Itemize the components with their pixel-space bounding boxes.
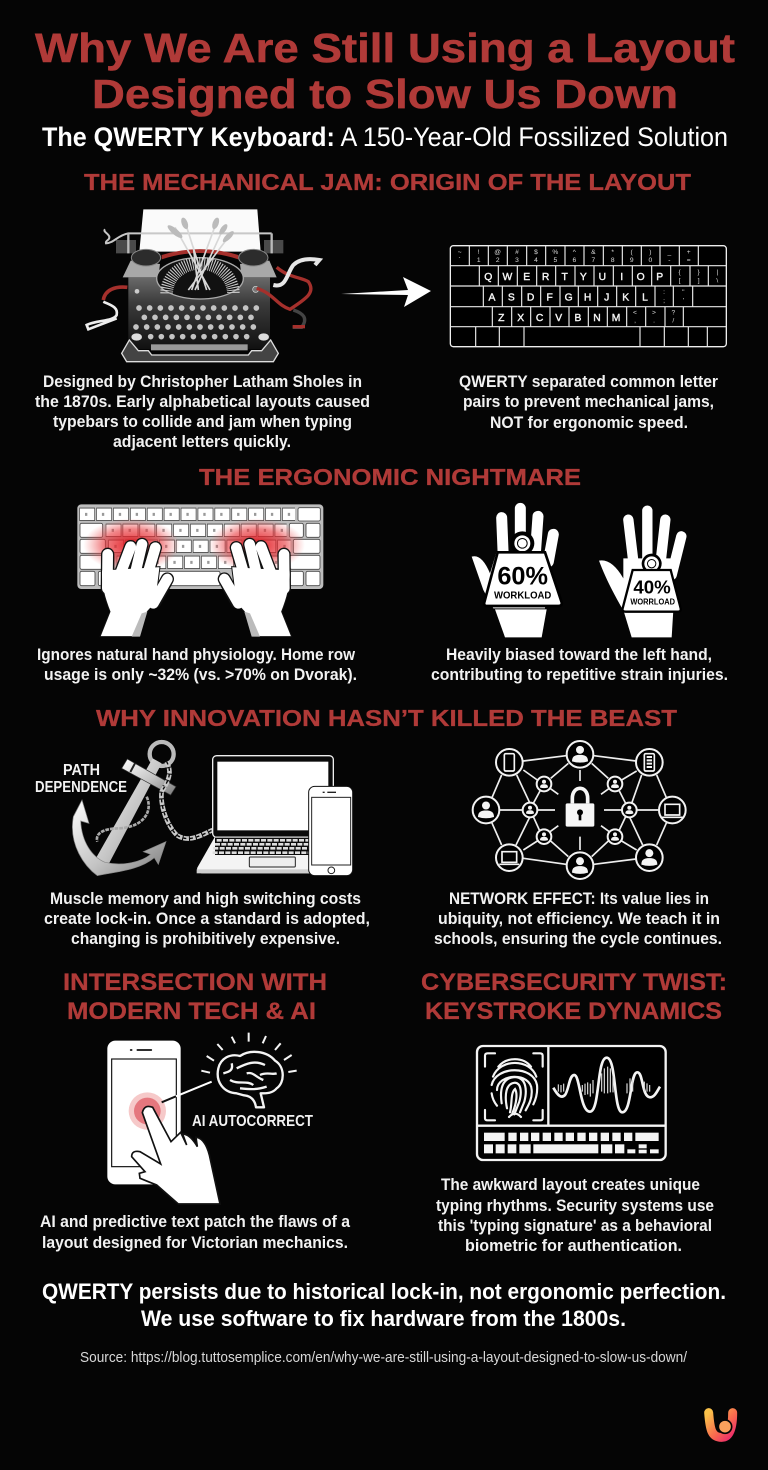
left hand — [100, 544, 167, 637]
icon: QWERTY keyboard outline: 1 — [477, 257, 481, 264]
icon: hand with 40% workload weight: 40% — [633, 577, 671, 598]
icon: QWERTY keyboard outline: Y — [580, 272, 587, 283]
label: path dependence: PATH — [63, 762, 100, 779]
icon: QWERTY keyboard outline: ( — [631, 249, 634, 256]
heading: ergonomic nightmare: THE ERGONOMIC NIGHTMARE — [199, 464, 581, 490]
icon: QWERTY keyboard outline — [450, 246, 726, 347]
text: home row usage — [37, 645, 357, 684]
icon: QWERTY keyboard outline: R — [542, 272, 549, 283]
icon: QWERTY keyboard outline: ^ — [573, 249, 577, 256]
icon: QWERTY keyboard outline: 0 — [648, 257, 652, 264]
heading: modern tech and AI: INTERSECTION WITH — [63, 969, 327, 996]
text: typing signature: this 'typing signature' as a behavioral — [438, 1216, 712, 1235]
icon: QWERTY keyboard outline: A — [489, 293, 496, 304]
text: QWERTY purpose: QWERTY separated common letter — [459, 372, 718, 391]
icon: QWERTY keyboard outline: 5 — [553, 257, 557, 264]
icon: QWERTY keyboard outline: % — [552, 249, 558, 256]
subtitle: The QWERTY Keyboard: A 150-Year-Old Fossilized Solution — [42, 122, 728, 152]
icon: QWERTY keyboard outline: N — [593, 313, 601, 324]
icon: phone with AI brain — [107, 1033, 297, 1204]
text: typing signature: biometric for authentication. — [465, 1236, 682, 1255]
conclusion — [42, 1279, 726, 1331]
heading: cybersecurity twist: CYBERSECURITY TWIST: — [421, 969, 727, 996]
heading: modern tech and AI — [63, 969, 327, 1025]
icon: hand with 60% workload weight: 60% — [497, 562, 548, 590]
source: Source: https://blog.tuttosemplice.com/en/why-we-are-still-using-a-layout-designed-to-slow-us-down/ — [80, 1349, 688, 1366]
icon: hand with 60% workload weight: WORKLOAD — [494, 591, 552, 602]
text: muscle memory: Muscle memory and high switching costs — [50, 889, 361, 908]
heading: the mechanical jam: THE MECHANICAL JAM: ORIGIN OF THE LAYOUT — [84, 169, 691, 195]
icon: QWERTY keyboard outline: D — [527, 293, 534, 304]
icon: QWERTY keyboard outline: 3 — [515, 257, 519, 264]
icon: QWERTY keyboard outline: ) — [649, 249, 651, 256]
icon: QWERTY keyboard outline: & — [591, 249, 596, 256]
icon: QWERTY keyboard outline: = — [687, 257, 691, 264]
fingerprint — [485, 1053, 543, 1120]
icon: QWERTY keyboard outline: 4 — [534, 257, 538, 264]
icon: QWERTY keyboard outline: ? — [671, 309, 675, 316]
text: left hand bias: Heavily biased toward the left hand, — [446, 645, 712, 664]
icon: QWERTY keyboard outline: $ — [534, 249, 538, 256]
icon: QWERTY keyboard outline: C — [536, 313, 544, 324]
text: muscle memory: create lock-in. Once a standard is adopted, — [44, 909, 370, 928]
logo — [709, 1413, 733, 1437]
icon: QWERTY keyboard outline: I — [620, 272, 623, 283]
icon: hands on keyboard heat map — [77, 504, 323, 637]
icon: QWERTY keyboard outline: V — [555, 313, 562, 324]
text: QWERTY purpose: pairs to prevent mechanical jams, — [463, 392, 714, 411]
icon: QWERTY keyboard outline: : — [663, 289, 665, 296]
icon: QWERTY keyboard outline: S — [508, 293, 515, 304]
text: Sholes origin: typebars to collide and jam when typing — [53, 412, 352, 431]
icon: QWERTY keyboard outline: G — [565, 293, 573, 304]
icon: QWERTY keyboard outline: B — [575, 313, 582, 324]
text: typing signature: The awkward layout creates unique — [441, 1175, 700, 1194]
text: AI patch: AI and predictive text patch the flaws of a — [40, 1212, 351, 1231]
text: muscle memory — [44, 889, 370, 948]
icon: QWERTY keyboard outline: < — [633, 309, 637, 316]
icon: QWERTY keyboard outline: > — [652, 309, 656, 316]
icon: QWERTY keyboard outline: * — [611, 249, 614, 256]
icon: QWERTY keyboard outline: ' — [683, 297, 684, 304]
icon: QWERTY keyboard outline: 7 — [591, 257, 595, 264]
icon: QWERTY keyboard outline: } — [698, 269, 701, 276]
icon: QWERTY keyboard outline: Q — [484, 272, 492, 283]
heading: why innovation: WHY INNOVATION HASN’T KILLED THE BEAST — [96, 705, 677, 731]
icon: QWERTY keyboard outline: H — [584, 293, 591, 304]
icon: QWERTY keyboard outline: @ — [494, 249, 501, 256]
title — [35, 25, 735, 117]
icon: QWERTY keyboard outline: E — [523, 272, 530, 283]
icon: QWERTY keyboard outline: 6 — [572, 257, 576, 264]
icon: QWERTY keyboard outline: ` — [459, 257, 461, 264]
text: Sholes origin: Designed by Christopher Latham Sholes in — [43, 372, 362, 391]
text: typing signature: typing rhythms. Security systems use — [436, 1196, 714, 1215]
icon: QWERTY keyboard outline: X — [517, 313, 524, 324]
icon: QWERTY keyboard outline: , — [634, 318, 636, 325]
text: Sholes origin: adjacent letters quickly. — [113, 432, 291, 451]
text: network effect — [434, 889, 722, 948]
label: path dependence: DEPENDENCE — [35, 779, 127, 796]
icon: QWERTY keyboard outline: # — [515, 249, 519, 256]
icon: QWERTY keyboard outline: 9 — [630, 257, 634, 264]
text: left hand bias: contributing to repetitive strain injuries. — [431, 665, 728, 684]
icon: QWERTY keyboard outline: L — [642, 293, 648, 304]
heading: cybersecurity twist: KEYSTROKE DYNAMICS — [425, 998, 722, 1025]
text: AI patch: layout designed for Victorian mechanics. — [42, 1233, 348, 1252]
icon: QWERTY keyboard outline: T — [562, 272, 569, 283]
icon: QWERTY keyboard outline: J — [604, 293, 609, 304]
icon: anchor chained to laptop and phone — [72, 742, 353, 876]
text: Sholes origin: the 1870s. Early alphabetical layouts caused — [35, 392, 370, 411]
text: home row usage: usage is only ~32% (vs. >70% on Dvorak). — [44, 665, 357, 684]
heading: cybersecurity twist — [421, 969, 727, 1025]
icon: QWERTY keyboard outline: " — [682, 289, 685, 296]
icon: QWERTY keyboard outline: + — [687, 249, 691, 256]
text: Sholes origin — [35, 372, 370, 451]
text: home row usage: Ignores natural hand physiology. Home row — [37, 645, 356, 664]
icon: QWERTY keyboard outline: M — [612, 313, 620, 324]
icon: QWERTY keyboard outline: W — [502, 272, 512, 283]
icon: hand with 40% workload weight — [599, 511, 681, 637]
text: muscle memory: changing is prohibitively expensive. — [71, 929, 340, 948]
arrow — [341, 277, 431, 307]
icon: QWERTY keyboard outline: ~ — [458, 249, 462, 256]
text: network effect: schools, ensuring the cycle continues. — [434, 929, 722, 948]
icon: QWERTY keyboard outline: P — [656, 272, 663, 283]
keys — [484, 1133, 659, 1153]
conclusion: QWERTY persists due to historical lock-in, not ergonomic perfection. — [42, 1279, 726, 1304]
icon: QWERTY keyboard outline: O — [637, 272, 645, 283]
icon: network with lock — [473, 741, 686, 879]
label: AI autocorrect: AI AUTOCORRECT — [192, 1113, 313, 1130]
conclusion: We use software to fix hardware from the 1800s. — [141, 1306, 626, 1331]
icon: QWERTY keyboard outline: F — [547, 293, 553, 304]
icon: QWERTY keyboard outline: ! — [478, 249, 480, 256]
text: typing signature — [436, 1175, 714, 1255]
icon: QWERTY keyboard outline: \ — [716, 277, 718, 284]
icon: QWERTY keyboard outline: . — [653, 318, 655, 325]
title: Why We Are Still Using a Layout — [35, 25, 735, 71]
waveform — [553, 1058, 660, 1112]
label: path dependence — [35, 762, 127, 796]
text: QWERTY purpose: NOT for ergonomic speed. — [490, 413, 688, 432]
right hand — [224, 544, 292, 637]
icon: QWERTY keyboard outline: U — [599, 272, 606, 283]
icon: QWERTY keyboard outline: 2 — [496, 257, 500, 264]
icon: QWERTY keyboard outline: [ — [679, 277, 681, 284]
text: network effect: NETWORK EFFECT: Its value lies in — [449, 889, 709, 908]
icon: QWERTY keyboard outline: K — [622, 293, 629, 304]
text: AI patch — [40, 1212, 351, 1252]
icon: typewriter — [87, 209, 319, 362]
text: network effect: ubiquity, not efficiency. We teach it in — [438, 909, 720, 928]
title: Designed to Slow Us Down — [92, 71, 678, 117]
icon: QWERTY keyboard outline: ] — [698, 277, 700, 284]
icon: QWERTY keyboard outline: ; — [663, 297, 665, 304]
icon: hand with 60% workload weight — [472, 508, 562, 637]
text: QWERTY purpose — [459, 372, 718, 432]
icon: QWERTY keyboard outline: / — [672, 318, 674, 325]
text: left hand bias — [431, 645, 728, 684]
icon: QWERTY keyboard outline: _ — [666, 249, 671, 256]
pointing hand — [132, 1106, 220, 1204]
icon: QWERTY keyboard outline: { — [679, 269, 682, 276]
icon: QWERTY keyboard outline: 8 — [611, 257, 615, 264]
icon: QWERTY keyboard outline: Z — [498, 313, 504, 324]
icon: QWERTY keyboard outline: | — [716, 269, 718, 276]
heading: modern tech and AI: MODERN TECH & AI — [67, 998, 316, 1025]
icon: biometric panel with fingerprint, waveform, keyboard — [477, 1046, 666, 1160]
icon: hand with 40% workload weight: WORRLOAD — [630, 596, 675, 606]
icon: QWERTY keyboard outline: - — [668, 257, 670, 264]
